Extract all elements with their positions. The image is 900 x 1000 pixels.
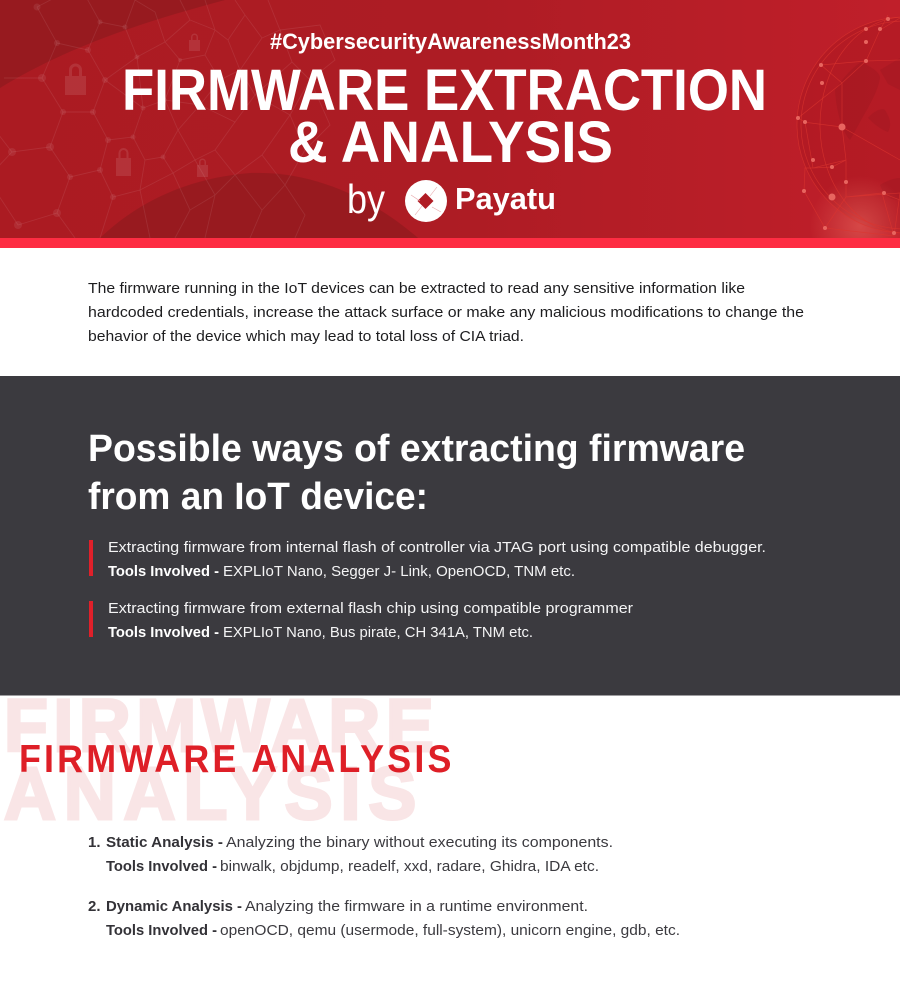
section heading: firmware analysis: FIRMWARE <box>4 685 434 767</box>
method: external flash chip: Extracting firmware from external flash chip using compatible programmer <box>108 600 633 617</box>
method: JTAG port: Extracting firmware from internal flash of controller via JTAG port using compatible debugger. <box>108 539 766 556</box>
icon: padlocks <box>65 34 208 177</box>
item: dynamic analysis: 2. <box>88 898 101 915</box>
intro paragraph: behavior of the device which may lead to total loss of CIA triad. <box>88 328 524 345</box>
title: & ANALYSIS <box>288 110 613 175</box>
title <box>122 58 767 175</box>
method: JTAG port <box>89 539 766 580</box>
item: dynamic analysis: Dynamic Analysis - <box>106 898 242 915</box>
intro paragraph <box>88 280 804 345</box>
panel heading <box>88 428 745 518</box>
section heading: firmware analysis <box>4 685 451 835</box>
method: external flash chip <box>89 600 633 641</box>
byline: by <box>347 176 385 222</box>
intro paragraph: The firmware running in the IoT devices can be extracted to read any sensitive information like <box>88 280 745 297</box>
title: FIRMWARE EXTRACTION <box>122 58 767 123</box>
item: static analysis: Analyzing the binary without executing its components. <box>226 834 613 851</box>
logo wordmark: Payatu <box>455 181 556 216</box>
icon: hexagon network <box>0 0 335 238</box>
panel heading: Possible ways of extracting firmware <box>88 428 745 470</box>
item: dynamic analysis: Analyzing the firmware in a runtime environment. <box>245 898 588 915</box>
analysis list <box>88 834 680 939</box>
section heading: firmware analysis: FIRMWARE ANALYSIS <box>19 737 451 780</box>
item: static analysis: binwalk, objdump, readelf, xxd, radare, Ghidra, IDA etc. <box>220 858 599 875</box>
hashtag: #CybersecurityAwarenessMonth23 <box>270 29 631 54</box>
panel: extraction methods <box>0 376 900 696</box>
panel: header banner <box>0 0 900 248</box>
panel heading: from an IoT device: <box>88 476 428 518</box>
intro paragraph: hardcoded credentials, increase the attack surface or make any malicious modifications to change the <box>88 304 804 321</box>
item: dynamic analysis <box>88 898 680 939</box>
item: static analysis: Tools Involved - <box>106 858 217 875</box>
method: JTAG port: Tools Involved - <box>108 563 219 580</box>
method: external flash chip: Tools Involved - <box>108 624 219 641</box>
section heading: firmware analysis: ANALYSIS <box>4 753 416 835</box>
method: JTAG port: EXPLIoT Nano, Segger J- Link, OpenOCD, TNM etc. <box>223 563 575 580</box>
item: dynamic analysis: openOCD, qemu (usermode, full-system), unicorn engine, gdb, etc. <box>220 922 680 939</box>
item: static analysis: Static Analysis - <box>106 834 223 851</box>
icon: Payatu logo <box>405 180 447 222</box>
icon: network globe <box>796 15 900 238</box>
method: external flash chip: EXPLIoT Nano, Bus pirate, CH 341A, TNM etc. <box>223 624 533 641</box>
item: dynamic analysis: Tools Involved - <box>106 922 217 939</box>
item: static analysis <box>88 834 613 875</box>
item: static analysis: 1. <box>88 834 101 851</box>
